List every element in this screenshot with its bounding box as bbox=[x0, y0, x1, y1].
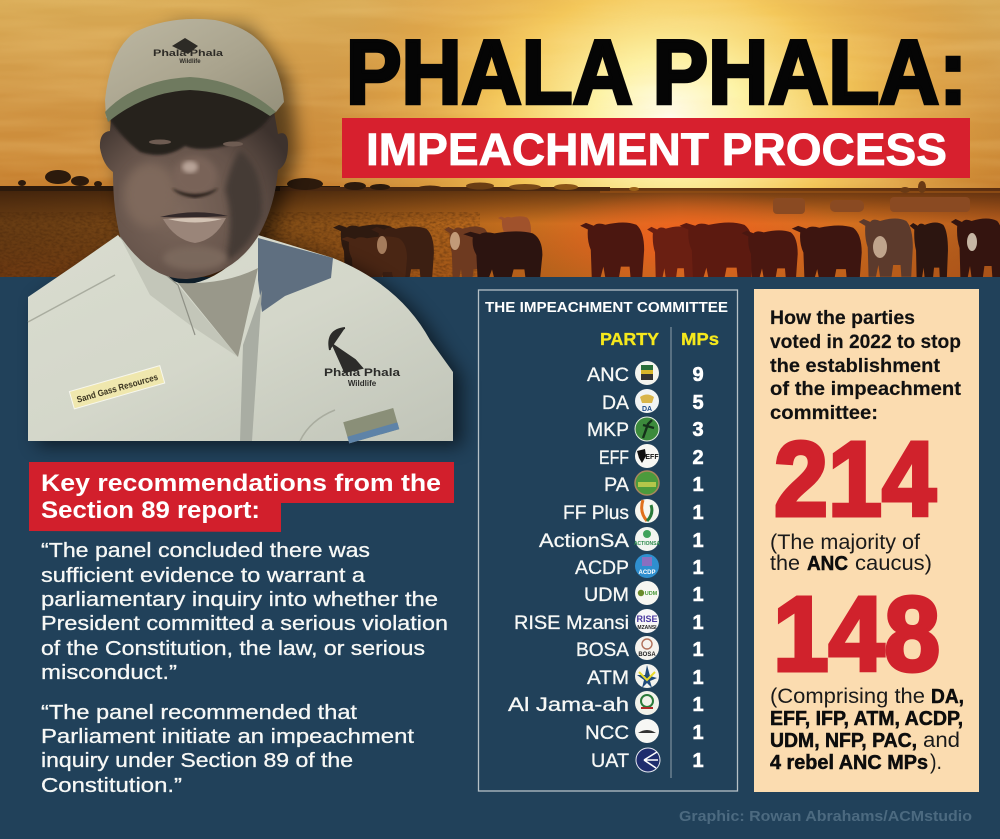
caption 214: ANC bbox=[807, 553, 848, 575]
row ACDP: 1 bbox=[692, 557, 704, 579]
shirt logo right: Phala Phala bbox=[324, 367, 401, 379]
row Al Jama-ah bbox=[508, 691, 704, 716]
shirt badge left: Sand Gass Resources bbox=[76, 372, 159, 405]
row UAT bbox=[591, 748, 704, 772]
row MKP: 3 bbox=[692, 419, 704, 441]
row PA: PA bbox=[604, 474, 629, 496]
caption 148 bbox=[770, 685, 964, 774]
shirt logo right: Wildlife bbox=[348, 379, 377, 388]
row BOSA: BOSA bbox=[638, 652, 656, 658]
caption 148: and bbox=[923, 729, 960, 752]
row ATM: ATM bbox=[587, 667, 629, 689]
row RISE Mzansi: RISE Mzansi bbox=[514, 612, 629, 634]
intro text: the establishment bbox=[770, 355, 941, 377]
row RISE Mzansi bbox=[514, 609, 704, 634]
row NCC: 1 bbox=[692, 722, 704, 744]
sky bbox=[0, 0, 1000, 192]
vote results panel bbox=[754, 289, 979, 792]
quote two: Constitution.” bbox=[41, 774, 182, 797]
key recommendations heading bbox=[29, 462, 454, 532]
quote one: of the Constitution, the law, or serious bbox=[41, 637, 425, 660]
row ANC bbox=[587, 361, 704, 386]
row UAT: 1 bbox=[692, 750, 704, 772]
caption 148: UDM, NFP, PAC, bbox=[770, 730, 917, 752]
row BOSA: 1 bbox=[692, 639, 704, 661]
quote one: misconduct.” bbox=[41, 661, 177, 684]
caption 214: the bbox=[770, 552, 800, 575]
herd bbox=[333, 216, 1000, 281]
row DA bbox=[602, 389, 704, 414]
row UDM: 1 bbox=[692, 584, 704, 606]
portrait shadow bbox=[37, 25, 462, 446]
sunset photo with cattle bbox=[0, 0, 1000, 290]
row ActionSA: ActionSA bbox=[539, 530, 629, 552]
caption 214: caucus) bbox=[855, 552, 932, 575]
credit: Graphic: Rowan Abrahams/ACMstudio bbox=[679, 809, 972, 825]
row UDM bbox=[584, 581, 704, 606]
cap logo bbox=[153, 38, 224, 65]
quote one bbox=[41, 539, 448, 684]
row BOSA: BOSA bbox=[576, 639, 629, 661]
row ActionSA: ACTIONSA bbox=[634, 541, 660, 547]
caption 148: DA, bbox=[931, 686, 964, 708]
row FF Plus bbox=[563, 499, 704, 524]
row UDM: UDM bbox=[645, 591, 658, 597]
subtitle banner: IMPEACHMENT PROCESS bbox=[366, 124, 947, 175]
intro text: of the impeachment bbox=[770, 378, 962, 400]
row PA bbox=[604, 471, 704, 496]
row EFF: EFF bbox=[645, 454, 659, 461]
intro text: committee: bbox=[770, 402, 878, 424]
row ATM: 1 bbox=[692, 667, 704, 689]
row EFF: 2 bbox=[692, 447, 704, 469]
row NCC bbox=[585, 719, 704, 744]
row Al Jama-ah: Al Jama-ah bbox=[508, 694, 629, 716]
portrait of the president bbox=[28, 19, 462, 446]
row UAT: UAT bbox=[591, 750, 629, 772]
row EFF: EFF bbox=[599, 447, 629, 469]
quote two: Parliament initiate an impeachment bbox=[41, 725, 414, 748]
pocket badge bbox=[343, 408, 399, 443]
row BOSA bbox=[576, 636, 704, 661]
caption 148: 4 rebel ANC MPs bbox=[770, 752, 928, 774]
caption 148: ). bbox=[930, 751, 942, 774]
cap bbox=[105, 19, 284, 122]
row DA: DA bbox=[642, 406, 652, 413]
row UDM: UDM bbox=[584, 584, 629, 606]
row RISE Mzansi: RISE bbox=[636, 614, 658, 624]
impeachment committee table bbox=[478, 290, 738, 791]
row ANC: ANC bbox=[587, 364, 629, 386]
caption 214 bbox=[770, 531, 932, 575]
quote one: President committed a serious violation bbox=[41, 612, 448, 635]
row FF Plus: 1 bbox=[692, 502, 704, 524]
row RISE Mzansi: 1 bbox=[692, 612, 704, 634]
party header: PARTY bbox=[600, 329, 659, 349]
intro text: voted in 2022 to stop bbox=[770, 331, 961, 353]
panel background bbox=[0, 277, 1000, 839]
key recommendations heading: Section 89 report: bbox=[41, 497, 260, 524]
row MKP bbox=[587, 417, 704, 441]
row ActionSA bbox=[539, 527, 704, 552]
table title: THE IMPEACHMENT COMMITTEE bbox=[485, 300, 728, 316]
row ATM bbox=[587, 664, 704, 689]
row ACDP: ACDP bbox=[575, 557, 629, 579]
quote one: parliamentary inquiry into whether the bbox=[41, 588, 438, 611]
caption 148: (Comprising the bbox=[770, 685, 925, 708]
caption 214: (The majority of bbox=[770, 531, 920, 554]
row ACDP bbox=[575, 554, 704, 579]
shirt bbox=[28, 235, 453, 441]
caption 148: EFF, IFP, ATM, ACDP, bbox=[770, 708, 963, 730]
row RISE Mzansi: MZANSI bbox=[637, 625, 657, 631]
row ActionSA: 1 bbox=[692, 530, 704, 552]
cap logo: Phala Phala bbox=[153, 48, 224, 58]
row DA: DA bbox=[602, 392, 629, 414]
row ANC: 9 bbox=[692, 364, 704, 386]
row NCC: NCC bbox=[585, 722, 629, 744]
row MKP: MKP bbox=[587, 419, 629, 441]
horizon trees bbox=[0, 170, 1000, 193]
distant cattle bbox=[773, 197, 970, 214]
quote two: inquiry under Section 89 of the bbox=[41, 749, 353, 772]
row ACDP: ACDP bbox=[638, 570, 656, 576]
intro text: How the parties bbox=[770, 307, 915, 329]
MPs header: MPs bbox=[681, 329, 719, 349]
quote two: “The panel recommended that bbox=[41, 701, 357, 724]
quote two bbox=[41, 701, 414, 797]
number 214: 214 bbox=[774, 420, 936, 538]
row Al Jama-ah: 1 bbox=[692, 694, 704, 716]
number 148: 148 bbox=[773, 576, 940, 694]
row EFF bbox=[599, 444, 704, 469]
quote one: “The panel concluded there was bbox=[41, 539, 370, 562]
quote one: sufficient evidence to warrant a bbox=[41, 564, 366, 587]
intro text bbox=[770, 307, 962, 424]
row DA: 5 bbox=[692, 392, 704, 414]
shirt logo right bbox=[324, 328, 401, 388]
field bbox=[0, 188, 1000, 277]
row PA: 1 bbox=[692, 474, 704, 496]
neck and face bbox=[100, 86, 288, 279]
key recommendations heading: Key recommendations from the bbox=[41, 470, 441, 497]
cap logo: Wildlife bbox=[179, 59, 201, 65]
row FF Plus: FF Plus bbox=[563, 502, 629, 524]
